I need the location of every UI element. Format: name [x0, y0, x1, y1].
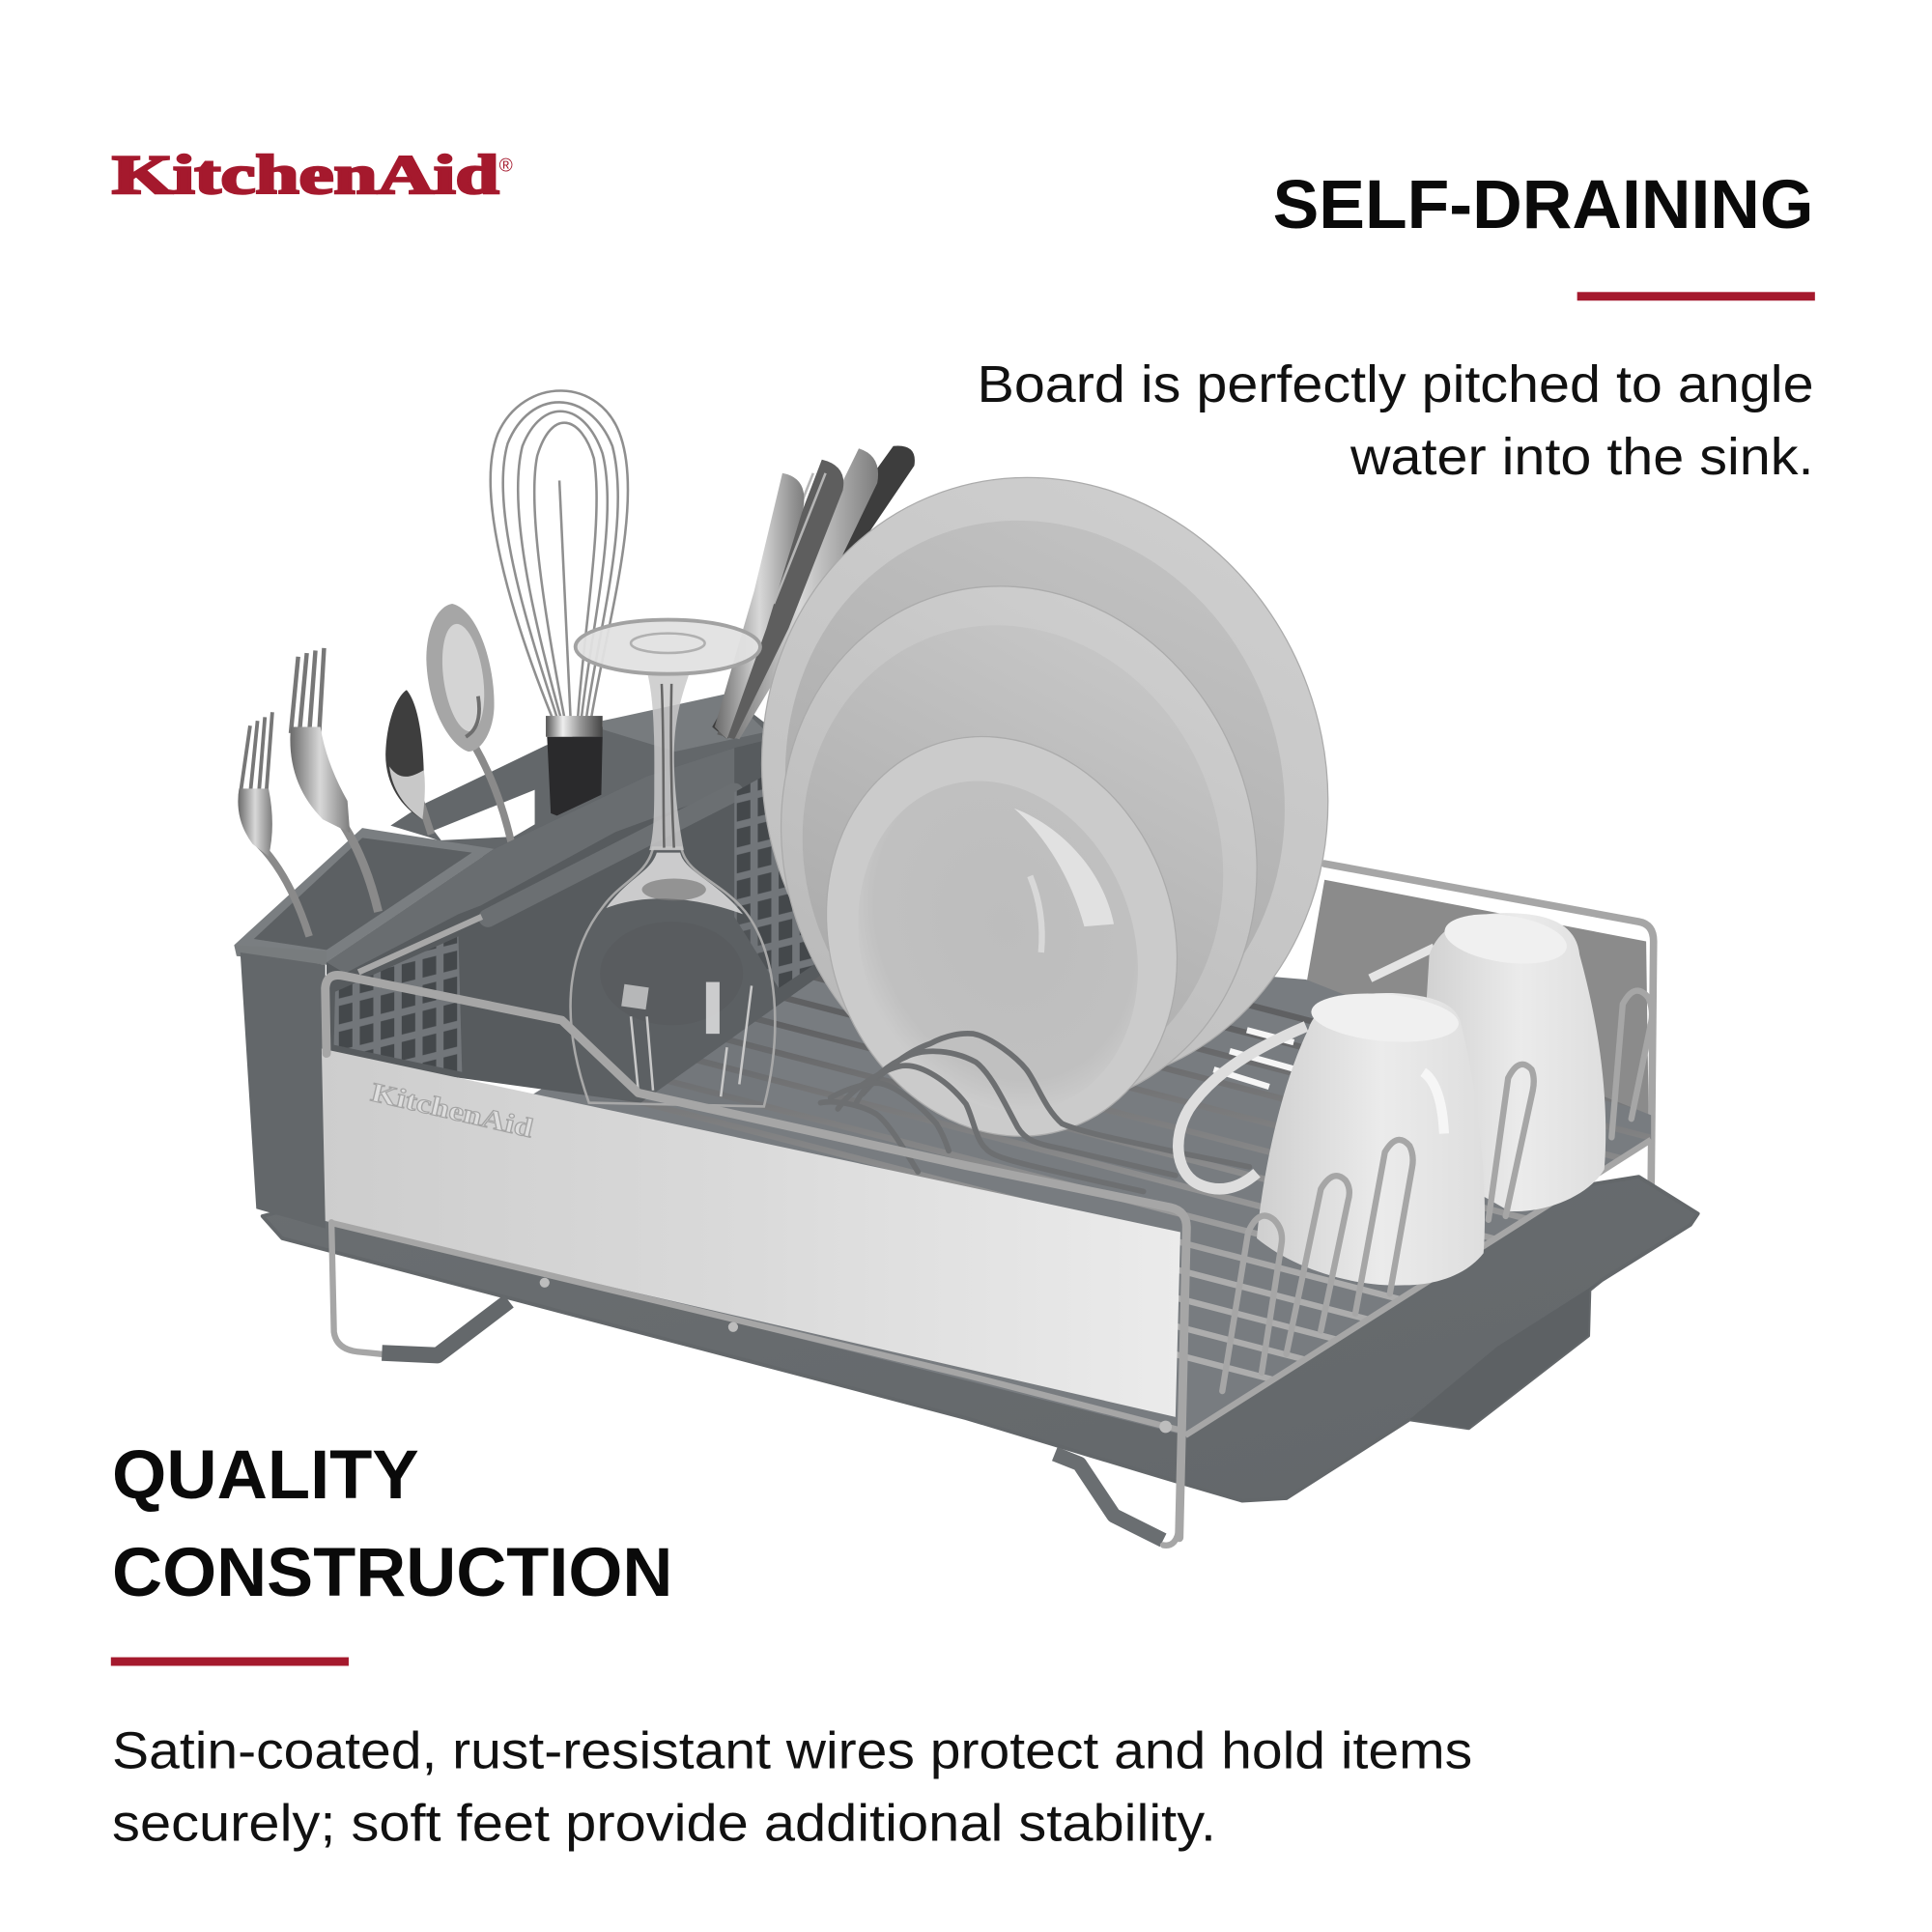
embossed brand text: KitchenAid [368, 1078, 536, 1144]
text: self-draining description: Board is perfectly pitched to angle [977, 356, 1814, 413]
caddy mesh: left [334, 936, 462, 1072]
rack back rail and panel [1306, 864, 1654, 1189]
plate holder wires [820, 1034, 1249, 1191]
red rule: quality construction [111, 1658, 349, 1665]
utensil caddy back wall [390, 694, 770, 868]
drain tray [263, 1158, 1698, 1501]
text: self-draining description [977, 356, 1814, 486]
icon: large spoon [426, 604, 511, 842]
mug: back [1370, 907, 1605, 1211]
front wire rim [326, 975, 1186, 1538]
caddy rod [358, 917, 482, 972]
icon: whisk [491, 390, 628, 815]
left cup rim and interior [234, 828, 494, 962]
plate: medium [708, 519, 1329, 1177]
logo: KitchenAid: ® [499, 156, 513, 176]
lower wire rail with rivets [334, 1224, 1177, 1433]
logo: KitchenAid: KitchenAid [112, 145, 499, 206]
red rule: self-draining [1577, 292, 1815, 300]
heading: quality construction [112, 1436, 672, 1611]
plate: large [676, 397, 1413, 1168]
icon: small spoon [385, 690, 431, 835]
front stainless panel [322, 1048, 1180, 1417]
caddy mesh: right [734, 773, 827, 988]
text: quality construction description: Satin-coated, rust-resistant wires protect and hold items [112, 1722, 1472, 1779]
left foot [331, 1222, 509, 1355]
logo: KitchenAid [112, 145, 513, 206]
heading: self-draining: SELF-DRAINING [1273, 166, 1814, 243]
right foot [1055, 1454, 1179, 1546]
icon: kitchen knives [712, 445, 915, 739]
infographic canvas [110, 153, 1815, 1851]
mug holder wire loops [1222, 991, 1652, 1391]
heading: quality construction: CONSTRUCTION [112, 1534, 672, 1611]
utensil caddy front wall [234, 739, 827, 1229]
text: quality construction description: securely; soft feet provide additional stability. [112, 1796, 1216, 1853]
icon: small fork [238, 712, 309, 936]
text: self-draining description: water into the sink. [1350, 429, 1814, 486]
text: quality construction description [112, 1722, 1472, 1853]
mug: front [1179, 988, 1485, 1286]
rack floor wires [533, 976, 1652, 1437]
wine glass [571, 620, 775, 1106]
plate: small [771, 687, 1233, 1186]
heading: quality construction: QUALITY [112, 1436, 419, 1514]
product photo: dish rack [234, 390, 1698, 1546]
icon: large fork [290, 648, 379, 912]
